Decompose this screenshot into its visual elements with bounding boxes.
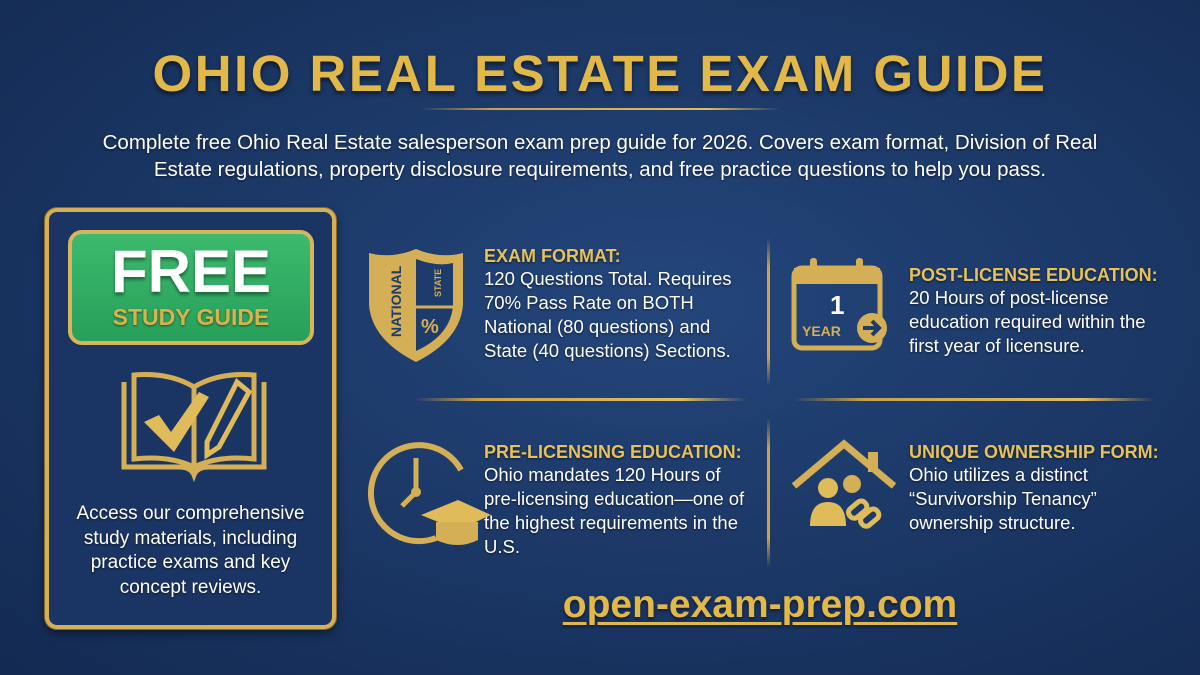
text: pre-licensing education: the highest requirements in the: [484, 512, 738, 533]
text: access description: concept reviews.: [120, 576, 261, 598]
text: pre-licensing education: U.S.: [484, 536, 520, 557]
text: unique ownership form: [908, 442, 1159, 534]
icon: calendar 1 year: [792, 258, 887, 350]
badge: free study guide: FREE: [111, 238, 271, 305]
text: post-license education: 20 Hours of post-license: [909, 287, 1108, 308]
icon: calendar 1 year: 1: [830, 290, 844, 320]
text: access description: Access our comprehensive: [76, 503, 305, 524]
text: unique ownership form: Ohio utilizes a distinct: [909, 464, 1088, 485]
subtitle: Complete free Ohio Real Estate salesperson exam prep guide for 2026. Covers exam format, Division of Real: [103, 131, 1097, 154]
text: unique ownership form: UNIQUE OWNERSHIP FORM:: [909, 442, 1159, 462]
text: exam format: EXAM FORMAT:: [484, 246, 621, 266]
icon: calendar 1 year: YEAR: [802, 323, 841, 339]
text: post-license education: education required within the: [909, 311, 1146, 332]
text: access description: practice exams and key: [91, 552, 290, 573]
badge: free study guide: [68, 230, 314, 345]
text: exam format: 120 Questions Total. Requires: [484, 268, 732, 289]
icon: house with people and link: [792, 440, 896, 529]
text: pre-licensing education: pre-licensing education—one of: [484, 488, 744, 509]
text: access description: study materials, including: [84, 528, 297, 548]
icon: shield national/state: STATE: [433, 269, 443, 297]
text: pre-licensing education: [484, 442, 745, 557]
url footer: open-exam-prep.com: [563, 583, 957, 626]
text: exam format: 70% Pass Rate on BOTH: [484, 292, 694, 313]
icon: clock with graduation cap: [368, 442, 491, 545]
text: exam format: State (40 questions) Sections.: [484, 340, 731, 361]
title underline: [420, 108, 780, 110]
text: exam format: National (80 questions) and: [484, 316, 710, 337]
text: post-license education: POST-LICENSE EDUCATION:: [909, 265, 1158, 285]
subtitle: Estate regulations, property disclosure requirements, and free practice questions to help you pass.: [154, 158, 1046, 181]
icon: book with check and pencil: [122, 372, 266, 482]
subtitle: [102, 131, 1097, 182]
text: unique ownership form: ownership structure.: [909, 512, 1076, 533]
text: post-license education: first year of licensure.: [909, 335, 1085, 356]
text: unique ownership form: “Survivorship Tenancy”: [909, 488, 1097, 509]
text: exam format: [484, 246, 732, 363]
icon: shield national/state: NATIONAL: [388, 265, 404, 337]
text: post-license education: [908, 265, 1158, 358]
panel: free study guide: [45, 208, 336, 629]
icon: shield national/state: [369, 249, 463, 362]
text: pre-licensing education: PRE-LICENSING EDUCATION:: [484, 442, 742, 462]
title: OHIO REAL ESTATE EXAM GUIDE: [153, 45, 1047, 102]
text: access description: [76, 503, 305, 598]
badge: free study guide: STUDY GUIDE: [113, 304, 269, 330]
text: pre-licensing education: Ohio mandates 120 Hours of: [484, 464, 721, 485]
icon: shield national/state: %: [421, 316, 439, 338]
